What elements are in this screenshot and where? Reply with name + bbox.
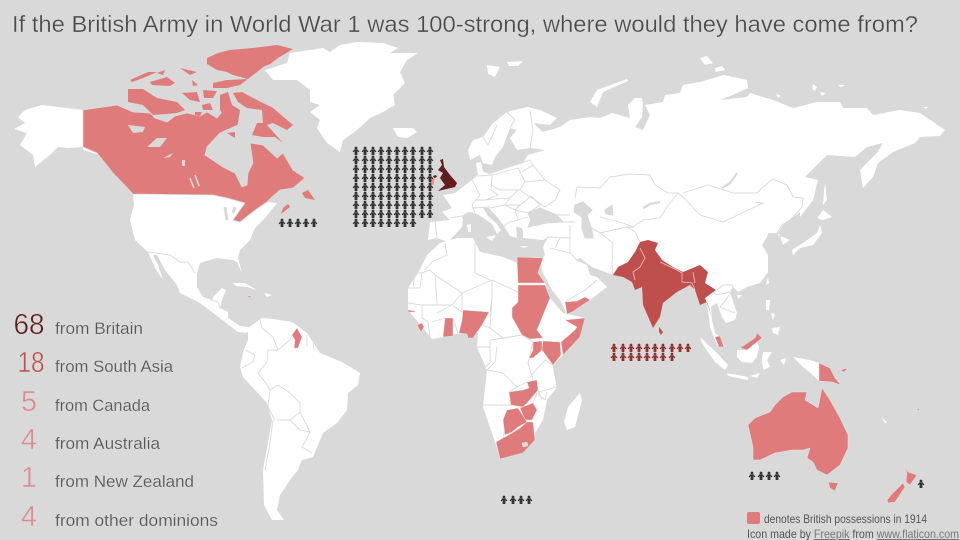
stat: 5 from Canada: 5 [21, 386, 37, 418]
pictogram: New Zealand, 1 figure [918, 480, 924, 488]
legend swatch [747, 512, 760, 524]
legend text: denotes British possessions in 1914 [764, 512, 927, 526]
stat: 68 from Britain: from Britain [55, 320, 143, 338]
stat: 4 from other dominions: 4 [21, 501, 37, 533]
stat: 68 from Britain [14, 309, 143, 341]
stat: 1 from New Zealand [21, 462, 194, 494]
legend [747, 512, 927, 526]
stat: 4 from Australia [21, 424, 161, 456]
Britain [433, 159, 457, 191]
stat: 1 from New Zealand: from New Zealand [55, 473, 194, 491]
inland seas and lakes [225, 173, 737, 238]
pictogram: other dominions, 4 figures [501, 496, 532, 504]
stat: 4 from other dominions: from other dominions [55, 512, 218, 530]
pictogram: Britain, 88 figures [353, 147, 433, 227]
stat: 1 from New Zealand: 1 [21, 462, 37, 494]
Canadian lakes [128, 125, 199, 188]
stat: 5 from Canada: from Canada [55, 397, 151, 415]
stat: 18 from South Asia: 18 [18, 347, 44, 379]
country borders [148, 111, 803, 470]
stat: 4 from Australia: 4 [21, 424, 37, 456]
South Asia [613, 240, 716, 335]
stat: 68 from Britain: 68 [14, 309, 44, 341]
stat: 18 from South Asia: from South Asia [55, 358, 174, 376]
Canada [83, 45, 315, 222]
pictogram: South Asia, 18 figures [611, 344, 691, 361]
pictogram: Canada, 5 figures [279, 219, 317, 227]
stat: 4 from Australia: from Australia [55, 435, 161, 453]
stat: 5 from Canada [21, 386, 151, 418]
stats list [14, 309, 218, 533]
stat: 4 from other dominions [21, 501, 218, 533]
pictogram: Australia, 4 figures [749, 472, 780, 480]
stat: 18 from South Asia [18, 347, 174, 379]
British possessions: Africa, Americas, Asia-Pacific [248, 178, 920, 503]
title: If the British Army in World War 1 was 100-strong, where would they have come from? [12, 11, 918, 37]
